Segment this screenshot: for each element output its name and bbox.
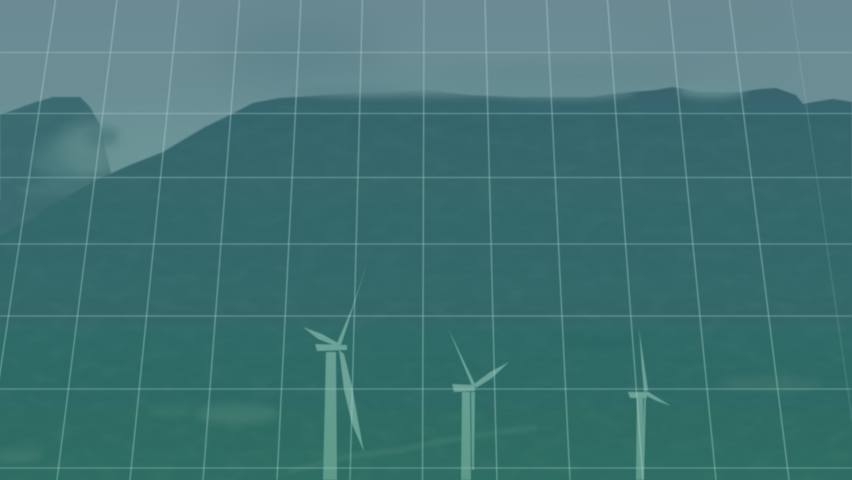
distant left peak <box>0 97 112 235</box>
dark storm clouds <box>215 15 760 87</box>
wind turbine 2 <box>448 328 509 480</box>
wind turbine 3 <box>628 328 671 480</box>
mountain surface texture <box>0 105 852 480</box>
lighter shrub patches on lower slope <box>0 336 820 462</box>
cloud veil on ridge line <box>285 76 746 99</box>
dirt road streak <box>288 427 537 472</box>
sky background <box>0 0 852 200</box>
wind turbine 1 <box>303 264 367 480</box>
mist over left peak <box>17 122 124 197</box>
